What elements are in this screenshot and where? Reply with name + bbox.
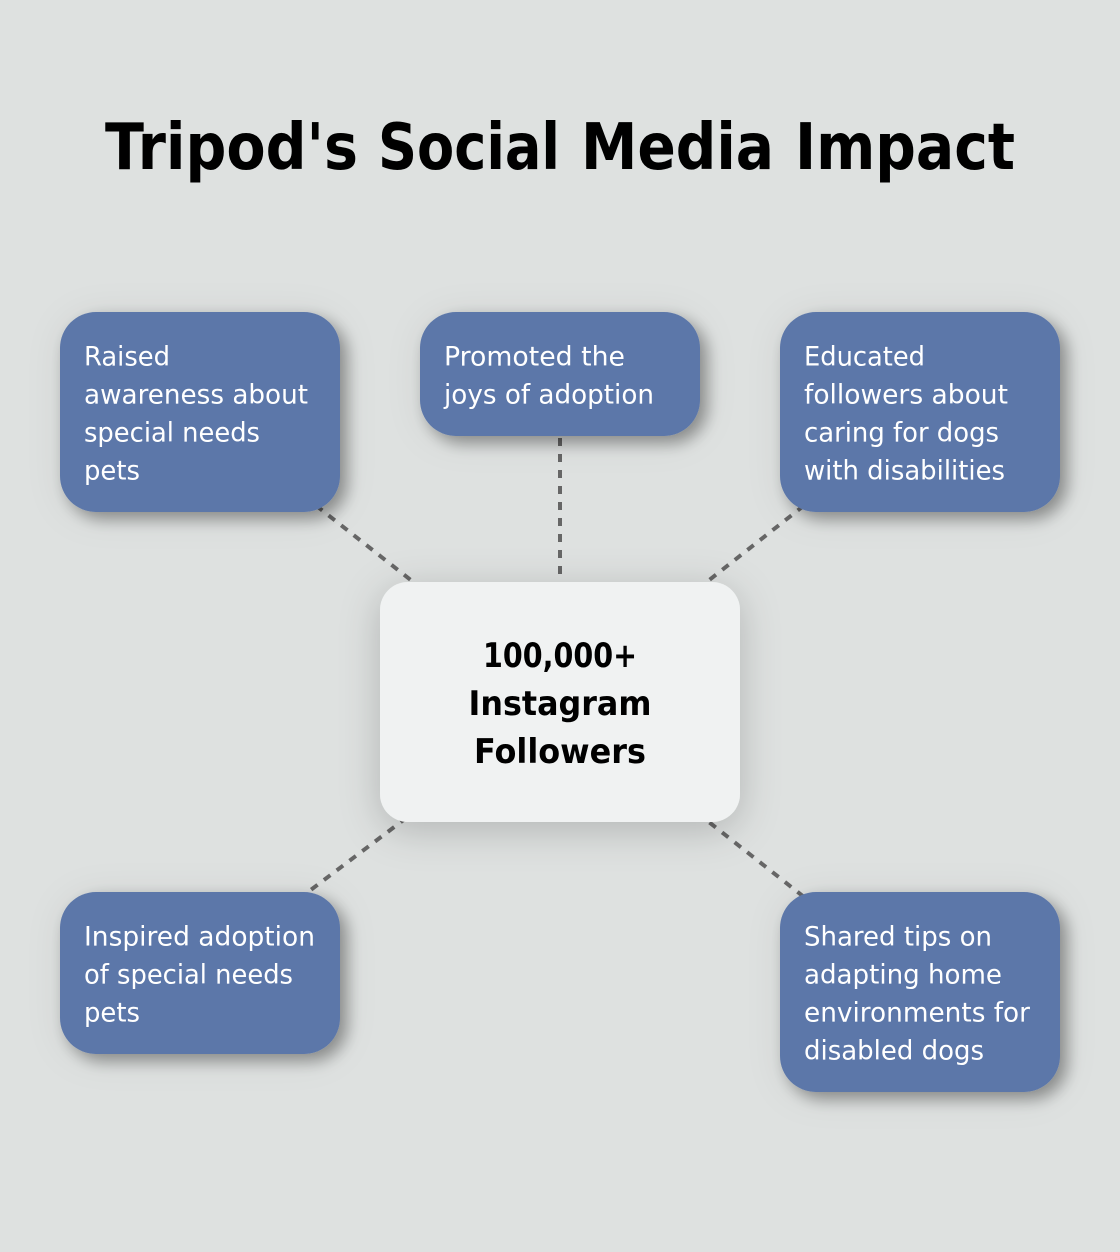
panel: shared tips: disabled dogs: [804, 1036, 984, 1066]
panel: shared tips: adapting home: [804, 960, 1002, 990]
panel: shared tips: environments for: [804, 998, 1031, 1028]
panel: raised awareness: awareness about: [84, 380, 308, 410]
panel: inspired adoption: Inspired adoption: [84, 922, 315, 952]
connector: bottom right: [710, 822, 804, 897]
title: Social: [378, 111, 560, 185]
panel: educated followers: with disabilities: [804, 456, 1005, 486]
panel: shared tips: Shared tips on: [804, 922, 992, 952]
connector: top right: [708, 506, 804, 581]
panel: central statistic: Instagram: [468, 684, 652, 724]
connector: bottom left: [308, 817, 407, 892]
panel: educated followers: [780, 312, 1060, 512]
panel: educated followers: Educated: [804, 342, 925, 372]
panel: inspired adoption: pets: [84, 998, 140, 1028]
panel: raised awareness: special needs: [84, 418, 260, 448]
panel: educated followers: caring for dogs: [804, 418, 999, 448]
connector: top centre: [558, 438, 562, 574]
panel: joys of adoption: [420, 312, 700, 436]
title: Media: [581, 111, 774, 185]
title: [105, 111, 1015, 185]
panel: joys of adoption: joys of adoption: [443, 380, 654, 410]
panel: central statistic: [380, 582, 740, 822]
panel: joys of adoption: Promoted the: [444, 342, 625, 372]
panel: inspired adoption: of special needs: [84, 960, 293, 990]
panel: central statistic: Followers: [474, 732, 646, 772]
panel: inspired adoption: [60, 892, 340, 1054]
panel: raised awareness: [60, 312, 340, 512]
title: Impact: [795, 111, 1015, 185]
connector: top left: [316, 506, 412, 581]
panel: raised awareness: pets: [84, 456, 140, 486]
panel: educated followers: followers about: [804, 380, 1008, 410]
title: Tripod's: [105, 111, 358, 185]
panel: central statistic: 100,000+: [483, 636, 637, 676]
panel: raised awareness: Raised: [84, 342, 170, 372]
panel: shared tips: [780, 892, 1060, 1092]
